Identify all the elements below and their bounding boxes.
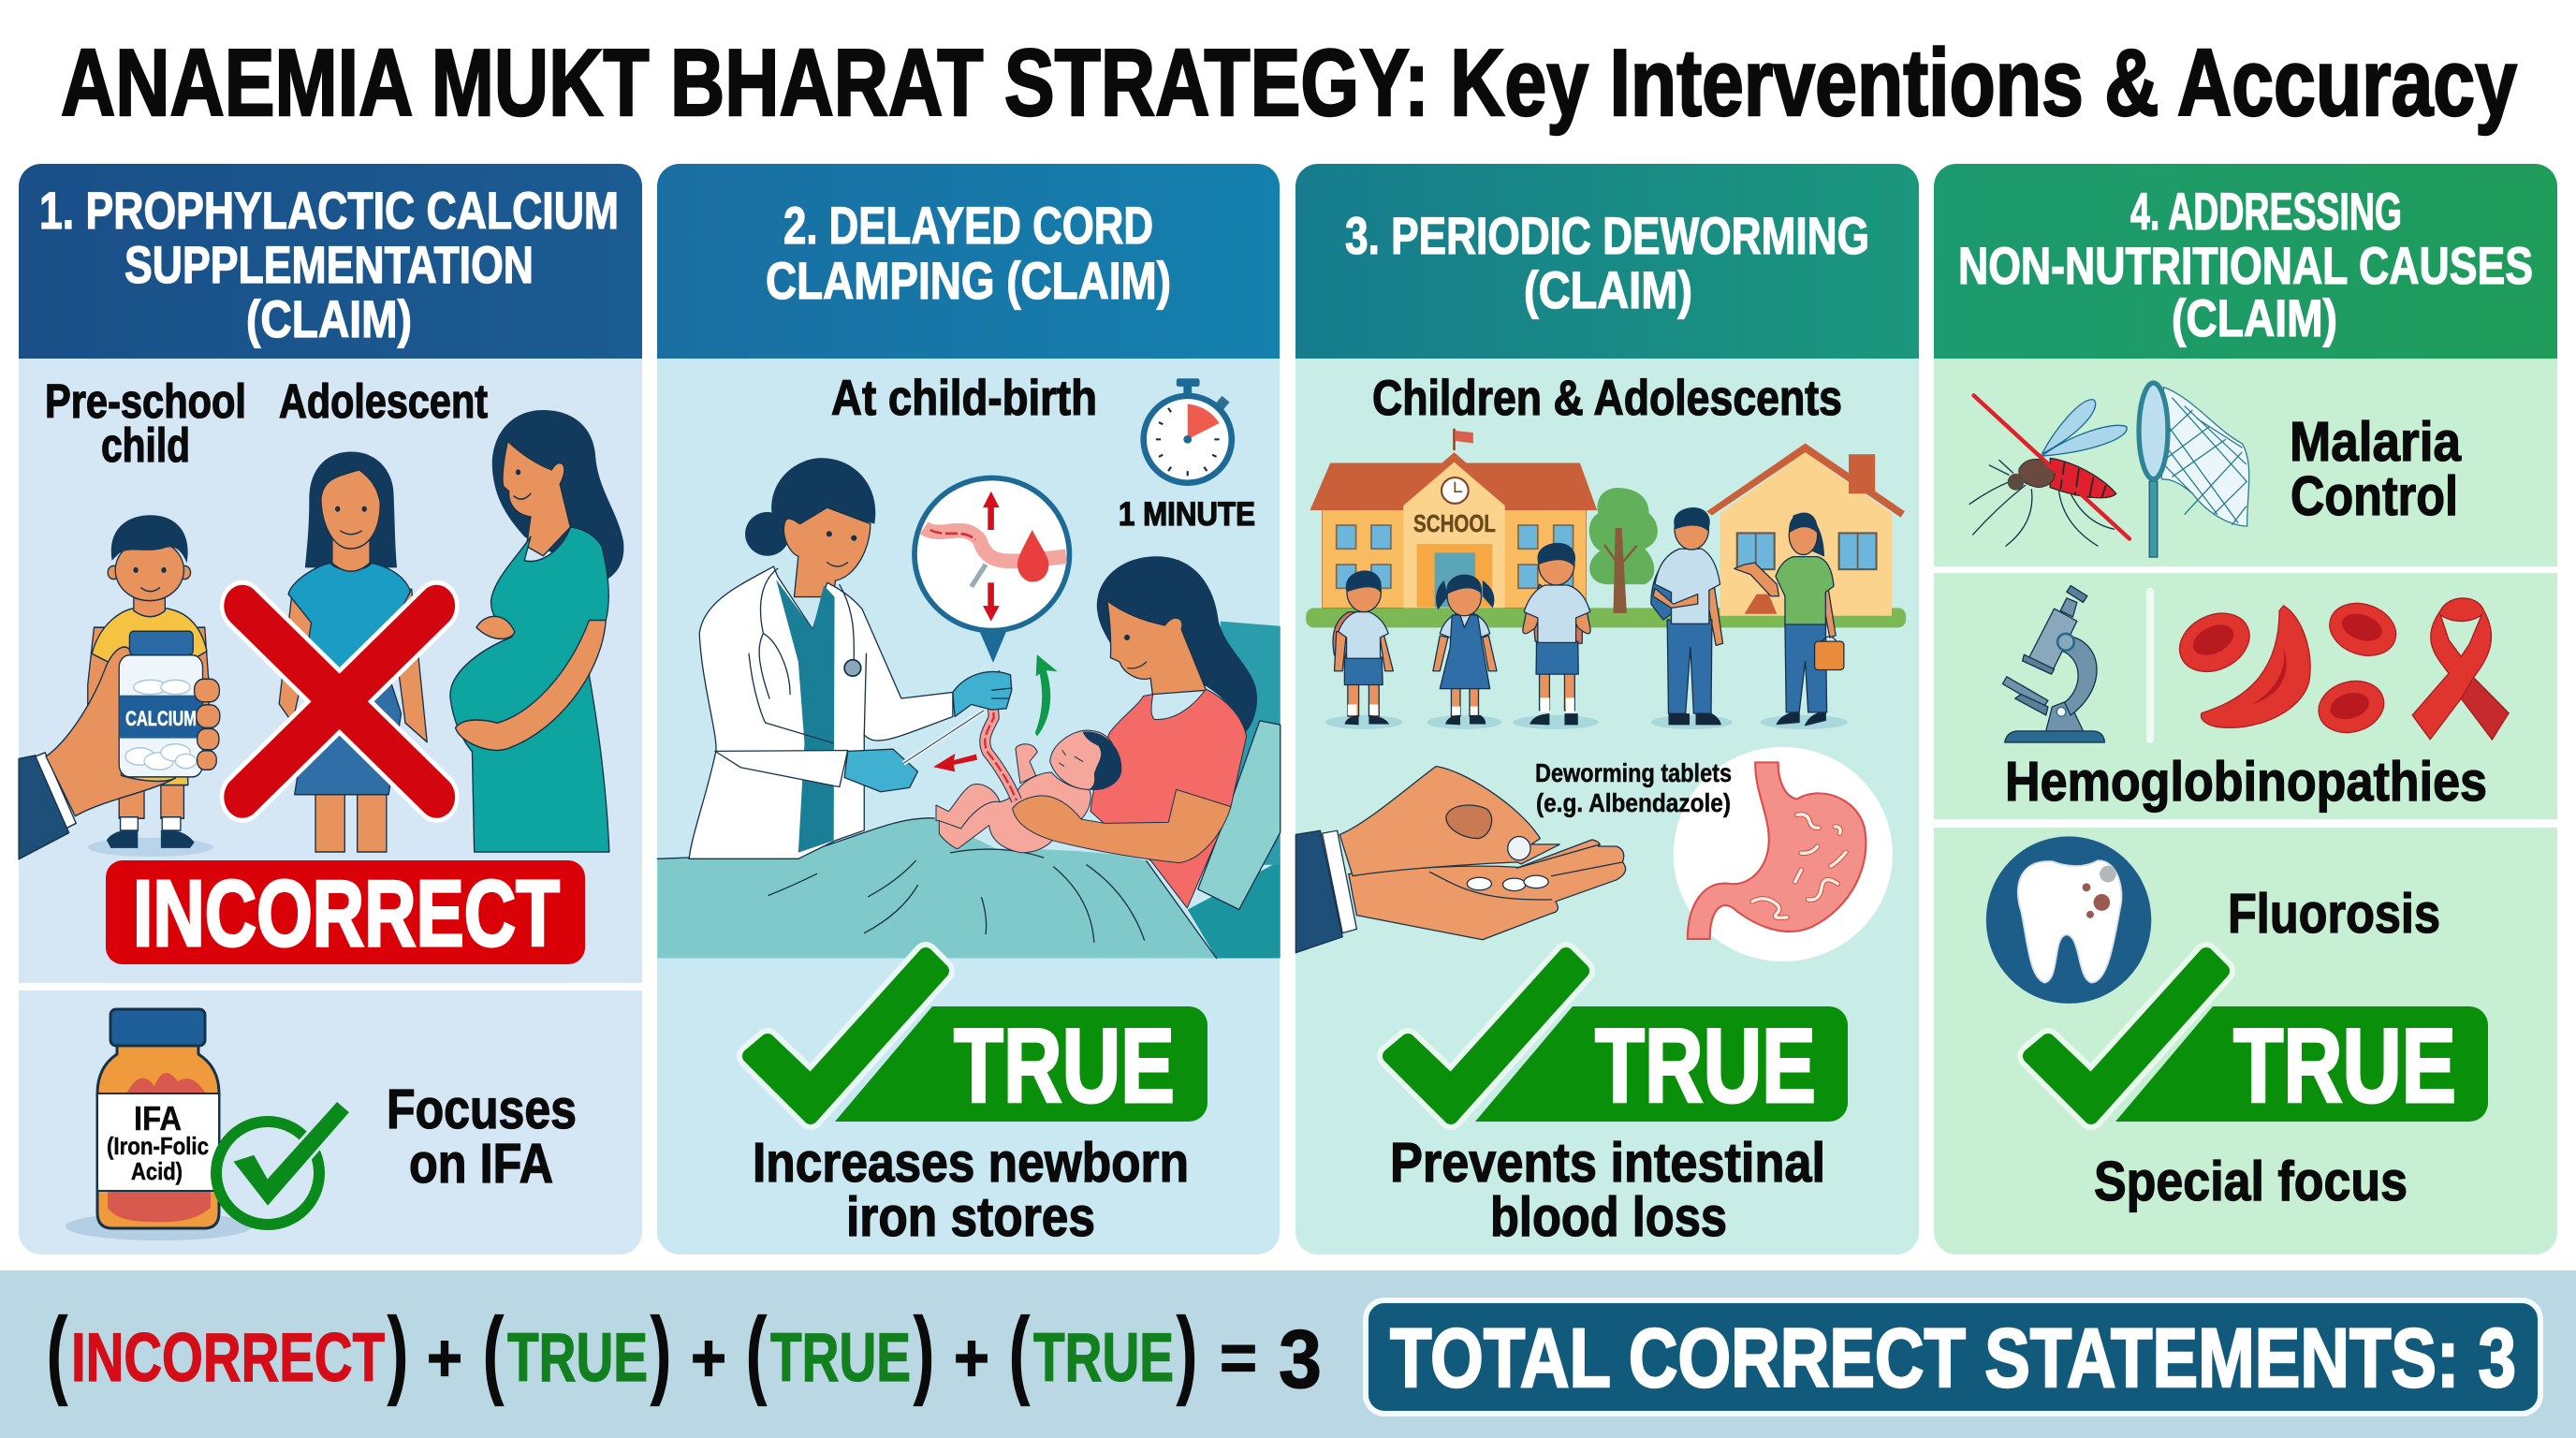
panel: 4 addressing non-nutritional causes [1934, 164, 2557, 1255]
panel 4 header: (CLAIM) [2172, 288, 2337, 347]
icon: IFA bottle: (Iron-Folic [107, 1132, 209, 1160]
panel 1 upper background [19, 359, 642, 983]
icon: red cross [242, 606, 436, 797]
label: school sign: SCHOOL [1413, 509, 1496, 537]
panel 3 header [1295, 164, 1919, 359]
caption: prevents intestinal blood loss: blood loss [1490, 1186, 1727, 1248]
badge: true [1390, 955, 1848, 1124]
caption: increases newborn iron stores: Increases newborn [753, 1132, 1189, 1194]
icon: pregnant woman [450, 410, 623, 852]
equation: TRUE [1033, 1320, 1174, 1396]
icon: stomach with worms [1674, 747, 1893, 961]
hemoglobinopathies background [1934, 573, 2557, 819]
icon: mother head [1097, 556, 1257, 735]
text: hemoglobinopathies: Hemoglobinopathies [2005, 751, 2487, 813]
no-mosquito slash [1974, 395, 2130, 539]
equation: ) [388, 1299, 408, 1407]
fluorosis background [1934, 828, 2557, 1255]
badge: true: TRUE [1595, 1007, 1816, 1124]
label: deworming tablets: Deworming tablets [1535, 758, 1732, 787]
icon: boy student [1523, 543, 1590, 725]
label: children and adolescents: Children & Adolescents [1372, 371, 1842, 426]
equation: INCORRECT [71, 1320, 385, 1396]
caption: special focus: Special focus [2094, 1151, 2408, 1212]
label: 1 minute: 1 MINUTE [1119, 496, 1255, 533]
panel: 2 delayed cord clamping [657, 164, 1281, 1255]
icon: mother arm and hand [1013, 789, 1231, 863]
text: focuses on IFA: Focuses [387, 1078, 577, 1140]
panel 3 body background [1295, 359, 1919, 1255]
illustration: school, house, students and deworming [1295, 429, 1906, 961]
icon: hand holding calcium bottle [19, 631, 220, 859]
text: malaria control: Malaria [2290, 411, 2462, 473]
bottom summary band [0, 1270, 2576, 1438]
icons: microscope, cells and ribbon [2002, 586, 2509, 743]
icon: girl student [1433, 575, 1497, 725]
badge: incorrect: INCORRECT [133, 861, 560, 966]
equation: ) [1177, 1299, 1197, 1407]
arrow: red left arrow [935, 756, 976, 770]
text: focuses on IFA: on IFA [409, 1133, 553, 1195]
caption: increases newborn iron stores: iron stores [846, 1186, 1095, 1248]
panel 2 header: 2. DELAYED CORD [783, 196, 1153, 255]
callout: clamp magnifier bubble [915, 477, 1069, 663]
panel 1 header [19, 164, 642, 359]
badge: true: TRUE [954, 1007, 1175, 1124]
icon: hands with tablets [1295, 767, 1626, 953]
label: at child-birth: At child-birth [831, 371, 1097, 426]
icon: blanket [657, 818, 1217, 959]
icon: IFA bottle: IFA [134, 1099, 182, 1137]
illustration: pregnant woman, adolescent, child and calcium bottle [19, 410, 623, 859]
panel 1 header: (CLAIM) [246, 289, 412, 348]
caption: prevents intestinal blood loss: Prevents intestinal [1390, 1132, 1825, 1194]
section: hemoglobinopathies [1934, 573, 2557, 819]
icon: tooth in circle [1986, 836, 2151, 1004]
caption: prevents intestinal blood loss [1390, 1132, 1825, 1248]
text: fluorosis: Fluorosis [2228, 883, 2440, 945]
icon: pillow and bed [1188, 622, 1281, 959]
label: deworming tablets: (e.g. Albendazole) [1536, 788, 1731, 817]
panel 3 header: (CLAIM) [1524, 260, 1692, 319]
band background [0, 1270, 2576, 1438]
mosquito thorax [2019, 459, 2055, 488]
panel 1 header: SUPPLEMENTATION [124, 235, 534, 294]
label: deworming tablets [1535, 758, 1732, 817]
badge: true [750, 955, 1208, 1124]
mosquito stripes [2060, 462, 2106, 498]
icon: mosquito legs [1969, 461, 2115, 546]
cord core [985, 674, 1017, 800]
text: malaria control: Control [2291, 465, 2458, 527]
equation: = [1220, 1321, 1257, 1396]
icon: mosquito body [2050, 458, 2116, 498]
equation: ( [1009, 1299, 1030, 1407]
icon: butterfly net [2139, 383, 2249, 557]
icon: IFA bottle: Acid) [131, 1157, 183, 1185]
icon: tree [1589, 488, 1658, 612]
icon: mosquito wings [2042, 400, 2127, 456]
equation: TRUE [507, 1320, 648, 1396]
panel: 1 prophylactic calcium supplementation [19, 164, 642, 1255]
bottle label: calcium: CALCIUM [125, 707, 197, 730]
equation: ( [746, 1299, 767, 1407]
icon: stopwatch [1144, 378, 1232, 483]
text: malaria control [2290, 411, 2462, 527]
icon: baby [936, 730, 1121, 853]
divider stroke [2146, 588, 2154, 743]
equation: ) [651, 1299, 671, 1407]
equation: + [691, 1321, 726, 1396]
label: adolescent: Adolescent [279, 374, 488, 428]
icon: umbilical cord [985, 674, 1017, 800]
icon: IFA bottle [66, 1009, 253, 1240]
malaria background [1934, 359, 2557, 566]
section: malaria control [1934, 359, 2557, 566]
caption: increases newborn iron stores [753, 1132, 1189, 1248]
equation: ) [914, 1299, 934, 1407]
equation: TRUE [770, 1320, 911, 1396]
icon: mother shirt [1090, 689, 1247, 908]
panel 3 header: 3. PERIODIC DEWORMING [1345, 206, 1869, 265]
text: focuses on IFA [387, 1078, 577, 1195]
panel 2 header: CLAMPING (CLAIM) [766, 251, 1171, 310]
label: pre-school child: child [101, 418, 190, 472]
equation: ( [483, 1299, 504, 1407]
equation: + [954, 1321, 989, 1396]
panel 4 header: 4. ADDRESSING [2130, 182, 2402, 241]
illustration: doctor, mother, baby and cord [657, 378, 1281, 959]
section: fluorosis [1934, 828, 2557, 1255]
icon: awareness ribbon [2412, 598, 2509, 740]
equation: + [427, 1321, 462, 1396]
equation [47, 1299, 1322, 1407]
icons: mosquito and net [1969, 383, 2249, 557]
equation: 3 [1279, 1313, 1322, 1405]
arrow: green upward arrow [1036, 657, 1054, 734]
lower section background [19, 990, 642, 1255]
label: pre-school child [45, 374, 246, 472]
panel 1 header: 1. PROPHYLACTIC CALCIUM [39, 181, 619, 240]
icon: doctor [689, 458, 1012, 858]
panel 2 body background [657, 359, 1280, 1255]
cord blood line [985, 674, 1017, 800]
icon: teen boy [1651, 507, 1723, 725]
panel 4 header [1934, 164, 2557, 359]
panel 2 header [657, 164, 1280, 359]
icon: green check in ring [216, 1100, 351, 1225]
equation: ( [47, 1299, 67, 1407]
ground strip [1306, 608, 1906, 627]
icon: shadows [1325, 715, 1848, 729]
mosquito head [2008, 474, 2024, 491]
panel 1 lower section: focuses on IFA [19, 990, 642, 1255]
label: pre-school child: Pre-school [45, 374, 246, 428]
badge: true: TRUE [2233, 1007, 2456, 1124]
illustration: mother torso, baby and cord [936, 674, 1247, 908]
icon: microscope [2002, 586, 2104, 742]
icon: house [1706, 443, 1905, 616]
icon: red blood cells [2171, 595, 2403, 740]
panel: 3 periodic deworming [1295, 164, 1919, 1255]
icon: teacher woman with bag [1734, 513, 1844, 726]
icon: adolescent girl [279, 451, 427, 852]
icon: small boy student [1333, 570, 1393, 725]
icon: school building [1310, 429, 1597, 608]
illustration: doctor and callout [689, 458, 1069, 858]
icon: pre-school boy [88, 515, 213, 857]
badge: true [2030, 955, 2488, 1124]
